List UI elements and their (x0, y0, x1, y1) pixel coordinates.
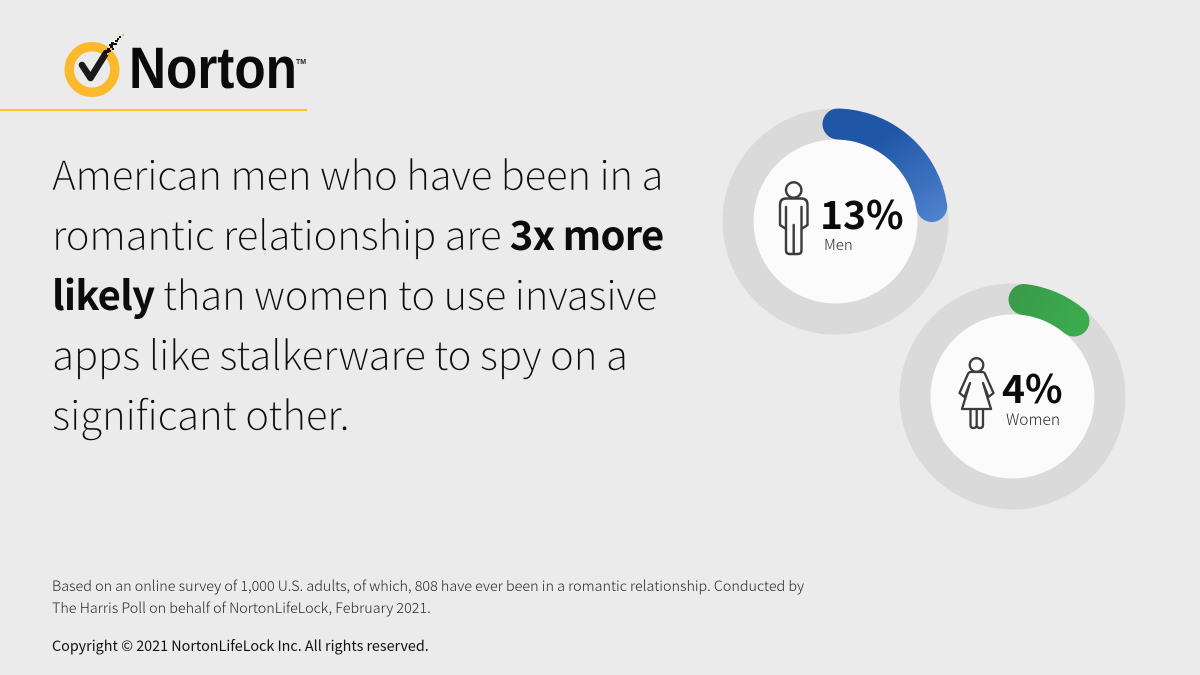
logo pixel trail (104, 34, 124, 55)
logo underline (0, 109, 307, 111)
main statement: American men who have been in a (52, 143, 663, 202)
main statement: romantic relationship are 3x more (52, 203, 663, 262)
survey footnote: The Harris Poll on behalf of NortonLifeLock, February 2021. (52, 597, 431, 618)
donut chart: men 13% (738, 124, 933, 319)
main statement: likely than women to use invasive (52, 263, 657, 322)
donut track (738, 124, 933, 319)
Norton logo (69, 34, 306, 101)
copyright: Copyright © 2021 NortonLifeLock Inc. All rights reserved. (52, 635, 429, 656)
label: Men (824, 234, 853, 255)
survey footnote: Based on an online survey of 1,000 U.S. adults, of which, 808 have ever been in a romantic relationship. Conducted by (52, 575, 804, 596)
label: Women (1006, 408, 1060, 430)
value: 4% (1002, 359, 1063, 415)
donut value arc (838, 124, 932, 206)
value: 13% (820, 185, 904, 241)
trademark: TM (296, 59, 306, 66)
logo checkmark (82, 53, 106, 78)
logo ring (69, 47, 115, 92)
donut track (915, 299, 1110, 494)
main statement: apps like stalkerware to spy on a (52, 323, 628, 382)
main statement: significant other. (52, 383, 349, 442)
logo wordmark: Norton (129, 36, 297, 101)
icon: woman (960, 358, 994, 428)
donut chart: women 4% (915, 299, 1110, 494)
icon: man (780, 182, 808, 254)
donut value arc (1024, 300, 1074, 321)
